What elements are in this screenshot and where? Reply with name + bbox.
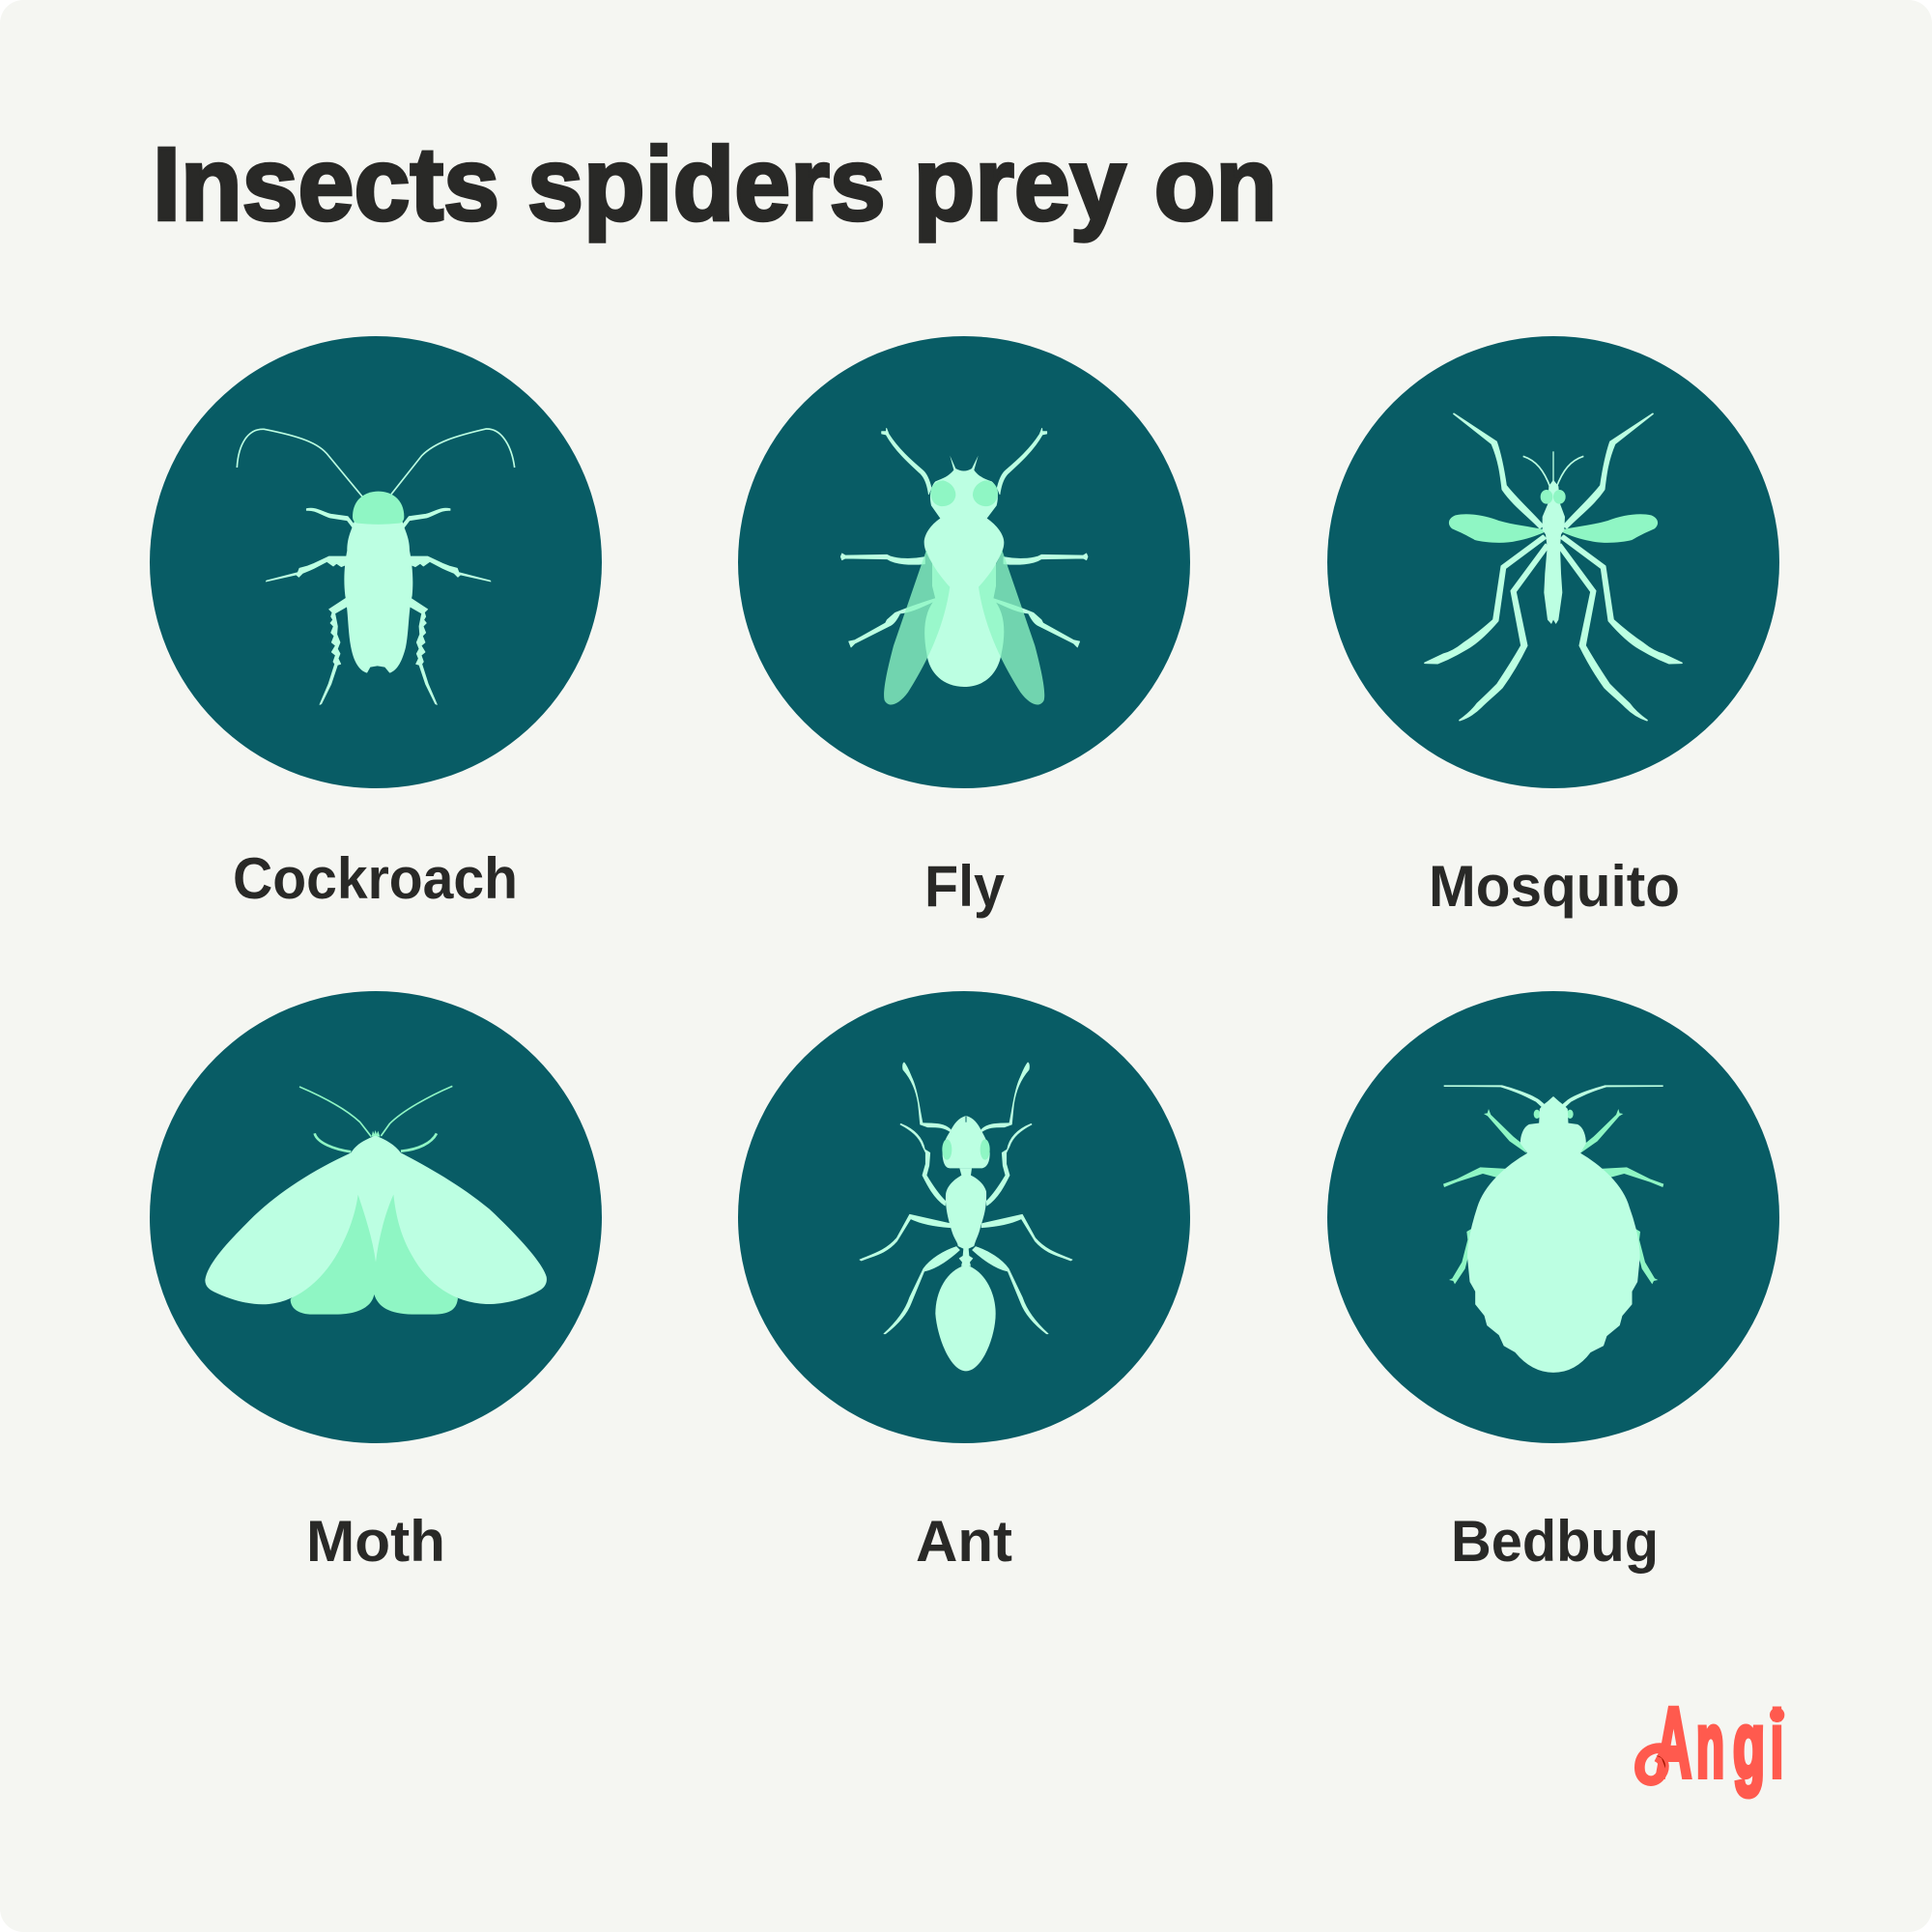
icon: cockroach bbox=[237, 429, 515, 704]
logo: Angi: n bbox=[1696, 1693, 1724, 1797]
logo wordmark: A bbox=[1656, 1688, 1691, 1798]
icon: ant bbox=[860, 1063, 1072, 1371]
label: cockroach: Cockroach bbox=[233, 846, 518, 911]
title: Insects spiders prey on bbox=[153, 126, 1277, 242]
logo: Angi bbox=[1639, 1688, 1784, 1798]
label: mosquito: Mosquito bbox=[1429, 854, 1680, 919]
logo loop bbox=[1639, 1748, 1668, 1781]
icon: fly bbox=[840, 428, 1088, 705]
panel: ant bbox=[738, 991, 1190, 1443]
panel: bedbug bbox=[1327, 991, 1779, 1443]
label: moth: Moth bbox=[306, 1509, 445, 1574]
logo accents bbox=[1656, 1708, 1784, 1769]
icon: bedbug bbox=[1443, 1085, 1663, 1372]
panel: cockroach bbox=[150, 336, 602, 788]
panel: mosquito bbox=[1327, 336, 1779, 788]
panel: fly bbox=[738, 336, 1190, 788]
label: fly: Fly bbox=[924, 854, 1006, 919]
logo: Angi: i bbox=[1771, 1693, 1783, 1797]
label: ant: Ant bbox=[916, 1509, 1012, 1574]
panel: moth bbox=[150, 991, 602, 1443]
label: bedbug: Bedbug bbox=[1451, 1509, 1659, 1574]
icon: moth bbox=[205, 1086, 547, 1315]
icon: mosquito bbox=[1425, 413, 1682, 721]
logo: Angi: g bbox=[1733, 1693, 1765, 1797]
